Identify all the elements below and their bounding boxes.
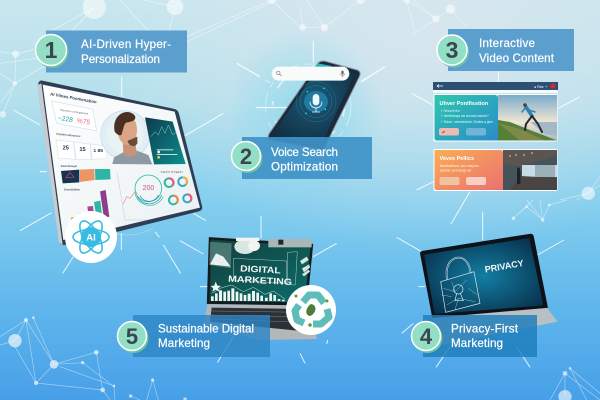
label 1: Personalization [81,53,160,66]
stat tiles: 15 [79,147,86,153]
privacy word: PRIVACY [484,258,524,275]
panel: digital marketing laptop: MARKETING [228,274,292,287]
padlock icon [441,258,480,312]
line chart [117,173,147,220]
laptop keyboard base [203,304,317,340]
bar chart [64,189,109,225]
video card two: Veves Pellics [440,156,474,162]
label 4: Privacy-First [451,322,519,336]
video card one: † Vanlehnays aw cunand sanore? [441,114,489,118]
laptop screen [207,238,313,305]
network bottom-left [0,318,158,400]
laptop screen [424,238,543,314]
label 2 [242,137,372,179]
video card one: Uhver Ponifisstion [440,101,489,107]
laptop lid [421,234,547,317]
search bar [272,67,349,81]
badge 4 [412,322,442,353]
metric card [52,101,97,131]
screen collage top [209,238,312,285]
icon: AI atom badge: AI [86,232,96,244]
badge 5: 5 [126,324,138,349]
label 5: Sustainable Digital [158,322,254,336]
video top bar [433,82,558,93]
badge 3 [437,35,469,68]
donut charts [161,170,191,204]
colored chips: Sdem Rwreges [61,166,78,168]
metric card: Reporten conneganents [60,108,89,116]
badge 2: 2 [240,144,252,169]
phone screen [272,65,355,147]
label 5: Marketing [158,337,210,350]
gauge [135,175,163,205]
panel: tablet dashboard illustration [37,81,202,245]
video card two: Boeskaellons, fors marpors [440,164,479,168]
stat tiles [56,132,107,159]
label 1 [46,30,187,72]
video card one [434,94,558,142]
label 4 [423,315,537,357]
network bottom-right [513,200,600,400]
video top bar: + [545,84,548,89]
bar chart: Seventibilititer [64,189,80,192]
stat tiles: Sredden alteraence [56,132,81,138]
screen bar chart [211,288,285,301]
network top-left [0,0,300,114]
panel: privacy laptop [421,234,557,345]
metric card: ~228 [57,115,74,124]
video card one: † Shore: unreartionist. Chates a give [441,120,493,124]
label 5 [133,315,270,357]
microphone icon [296,82,336,122]
tablet silver edge [37,83,63,245]
phone body [268,61,360,150]
badge 2 [232,142,262,173]
badge 5 [118,322,148,353]
label 3: Interactive [479,37,535,50]
laptop base [432,307,557,345]
label 4: Marketing [451,337,503,350]
radial tech rings [237,50,385,149]
portrait [101,111,152,164]
panel: digital marketing laptop [203,238,317,340]
label 2: Optimization [271,160,338,174]
panel: interactive video UI [433,82,558,191]
panel: phone with voice search [237,50,385,150]
video card two [434,149,558,191]
teal data card [145,117,186,164]
badge 3: 3 [446,37,458,63]
metric card: %75 [76,118,91,127]
donut charts: Sugeetes alr laggetes [161,170,184,173]
stat tiles: 25 [63,145,69,151]
digital marketing headline: DIGITAL [240,263,282,275]
stat tiles: 1 85 [93,148,103,154]
tablet screen [43,85,200,240]
label 3: Video Content [479,52,555,65]
tablet frame [39,81,202,244]
radial strokes [13,63,300,172]
badge 1 [36,34,68,68]
badge 4: 4 [420,324,433,349]
label 3 [448,29,574,71]
network top-right [300,0,600,200]
video top bar: ● Rea [534,85,544,89]
badge 1: 1 [45,37,58,63]
icon: AI atom badge [65,211,117,263]
dashboard title: AI Vitnes Poomenation [50,91,97,105]
label 1: AI-Driven Hyper- [81,38,171,51]
icon: recycling badge [286,285,336,335]
video card two: pwetoe cerrirspogt ais [440,168,472,172]
gauge: 200 [143,185,154,192]
label 2: Voice Search [271,146,338,159]
video card one: † Reconh the [441,109,460,113]
colored chips [61,166,111,183]
